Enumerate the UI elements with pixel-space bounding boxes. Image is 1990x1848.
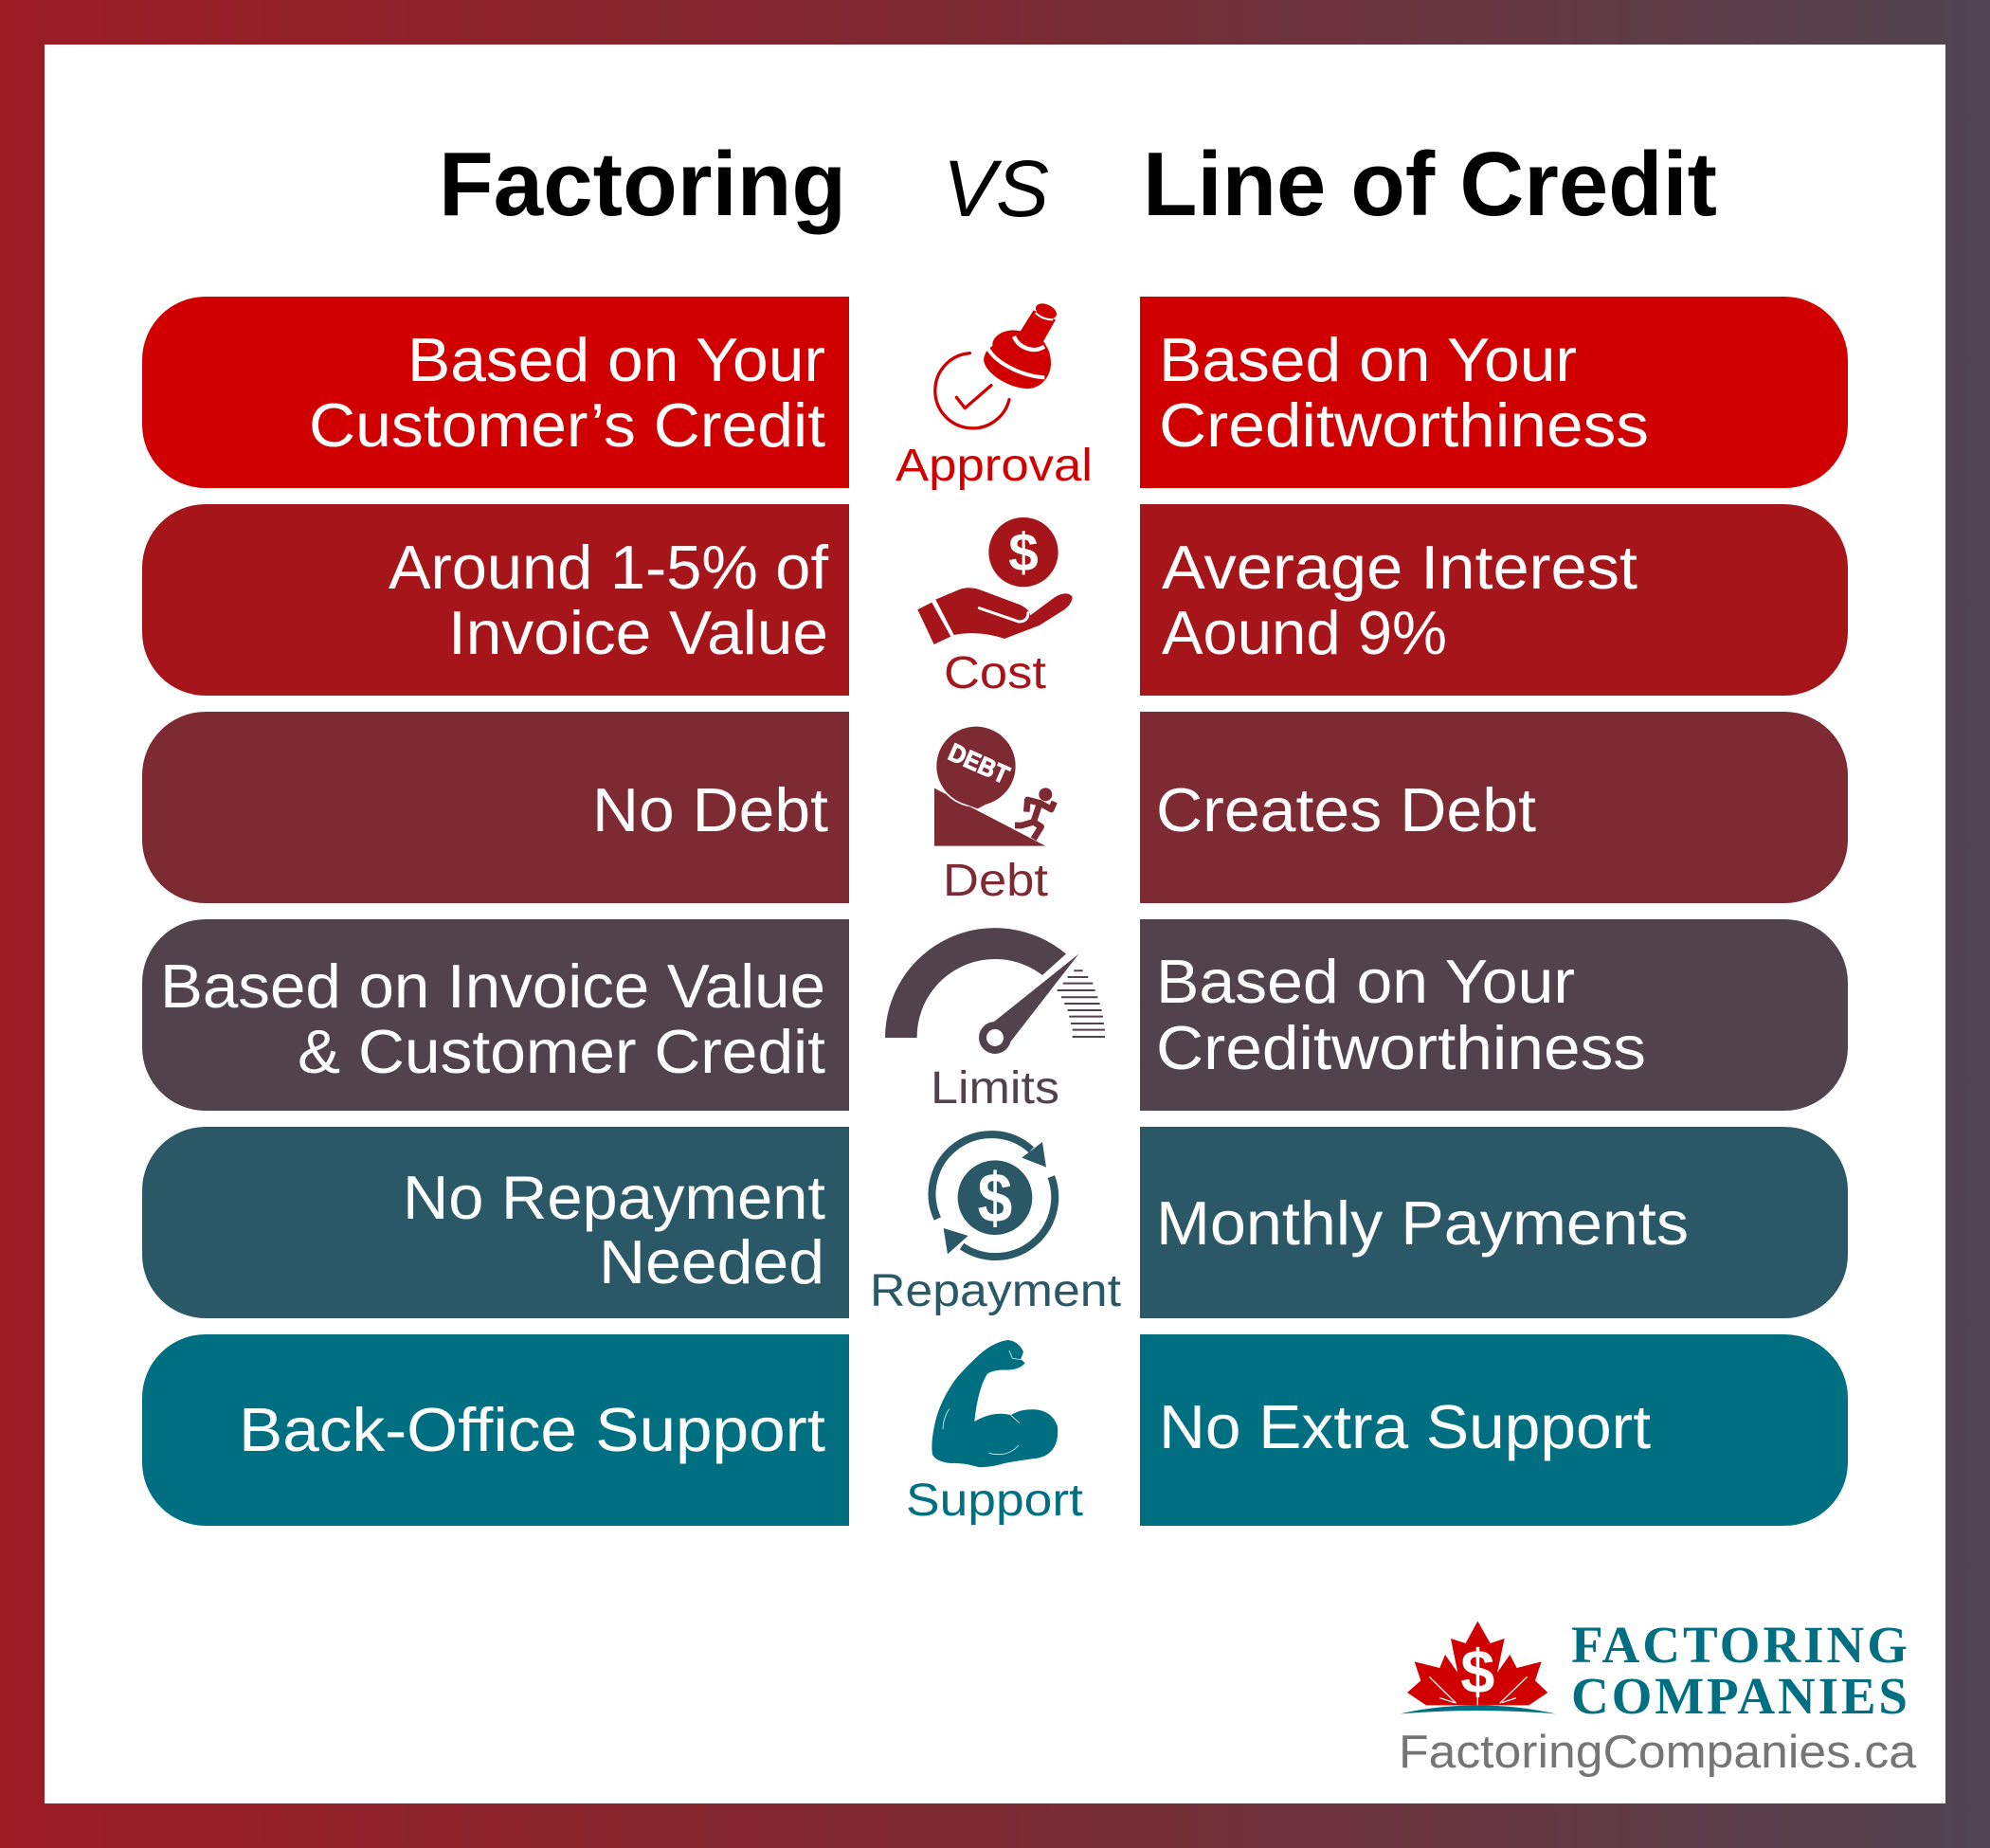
right pill: limits (1140, 919, 1848, 1111)
factoring text: repayment: No Repayment (403, 1163, 825, 1232)
line of credit text: limits: Based on Your (1156, 947, 1575, 1016)
heading: Factoring: Factoring (439, 134, 846, 235)
row: cost (142, 504, 1848, 698)
factoring text: repayment (403, 1163, 825, 1296)
line of credit text: debt: Creates Debt (1156, 775, 1536, 844)
icon: debt boulder and runner (934, 725, 1055, 846)
right pill: debt (1140, 712, 1848, 903)
icon: speedometer (885, 928, 1105, 1054)
factoring text: approval: Customer’s Credit (309, 390, 825, 460)
icon: debt boulder and runner: DEBT (944, 738, 1014, 789)
factoring text: cost: Invoice Value (448, 598, 828, 667)
factoring text: repayment: Needed (599, 1227, 824, 1296)
icon: maple leaf with dollar (1400, 1622, 1556, 1713)
label: Limits: Limits (931, 1063, 1059, 1114)
line of credit text: cost (1162, 533, 1637, 667)
line of credit text: approval: Creditworthiness (1159, 390, 1649, 460)
right pill: repayment (1140, 1127, 1848, 1318)
left pill: support (142, 1334, 849, 1526)
line of credit text: support: No Extra Support (1159, 1392, 1651, 1461)
row: debt (142, 712, 1848, 906)
factoring text: debt: No Debt (592, 775, 828, 844)
line of credit text: cost: Aound 9% (1162, 598, 1447, 667)
right pill: cost (1140, 504, 1848, 696)
icon: approval stamp (935, 300, 1059, 428)
left pill: cost (142, 504, 849, 696)
line of credit text: cost: Average Interest (1162, 533, 1637, 602)
row: repayment (142, 1127, 1848, 1318)
label: Cost: Cost (944, 648, 1046, 698)
factoring text: cost (389, 533, 829, 667)
logo wordmark (1571, 1616, 1908, 1725)
factoring text: limits: Based on Invoice Value (160, 951, 825, 1021)
logo wordmark: FACTORING (1571, 1616, 1908, 1674)
icon: hand with coin (917, 517, 1073, 644)
line of credit text: approval (1159, 325, 1649, 460)
row: support (142, 1334, 1848, 1526)
line of credit text: approval: Based on Your (1159, 325, 1577, 394)
icon: dollar cycle: $ (978, 1158, 1012, 1237)
icon: hand with coin: $ (1008, 524, 1039, 584)
logo (1399, 1616, 1917, 1778)
factoring text: cost: Around 1-5% of (389, 533, 829, 602)
label: Debt: Debt (943, 856, 1048, 906)
line of credit text: repayment: Monthly Payments (1156, 1188, 1689, 1258)
icon: maple leaf with dollar: $ (1460, 1637, 1494, 1706)
icon: dollar cycle (932, 1134, 1055, 1257)
left pill: approval (142, 297, 849, 488)
label: Repayment: Repayment (870, 1266, 1121, 1316)
factoring text: limits: & Customer Credit (298, 1017, 825, 1086)
title (439, 134, 1717, 235)
factoring text: limits (160, 951, 825, 1086)
left pill: limits (142, 919, 849, 1111)
icon: flexed arm (932, 1340, 1058, 1467)
label: Support: Support (906, 1476, 1083, 1526)
factoring text: approval (309, 325, 825, 460)
row: limits (142, 919, 1848, 1114)
right pill: approval (1140, 297, 1848, 488)
left pill: debt (142, 712, 849, 903)
line of credit text: limits: Creditworthiness (1156, 1013, 1646, 1082)
left pill: repayment (142, 1127, 849, 1318)
factoring text: approval: Based on Your (407, 325, 825, 394)
heading: Line of Credit: Line of Credit (1143, 134, 1717, 235)
label: Approval: Approval (896, 441, 1093, 491)
right pill: support (1140, 1334, 1848, 1526)
row: approval (142, 297, 1848, 491)
logo wordmark: COMPANIES (1571, 1667, 1908, 1725)
line of credit text: limits (1156, 947, 1646, 1082)
website: FactoringCompanies.ca (1399, 1727, 1917, 1778)
factoring text: support: Back-Office Support (239, 1395, 825, 1464)
heading: VS: VS (943, 144, 1049, 233)
